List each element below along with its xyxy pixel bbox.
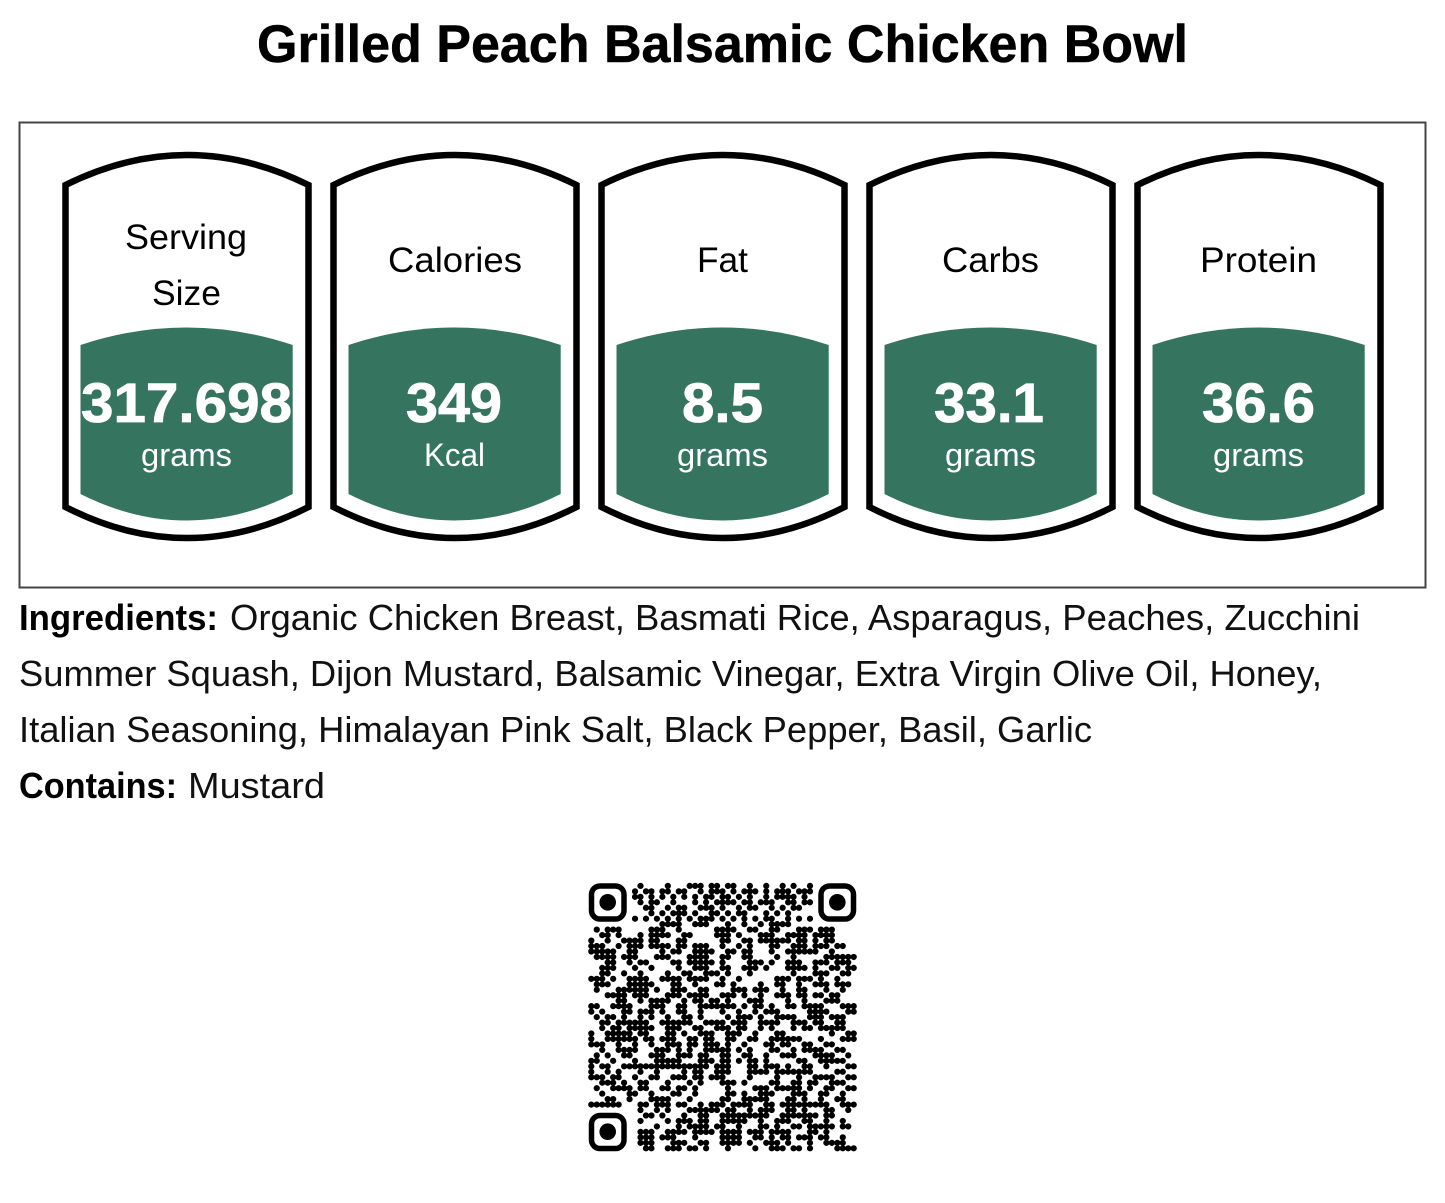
badge: calories: Calories xyxy=(388,241,522,280)
allergens text: Contains: xyxy=(19,765,177,806)
badge: serving size: Size xyxy=(152,274,221,313)
badge: calories xyxy=(334,155,576,538)
badge: carbs: grams xyxy=(945,437,1036,473)
ingredients text: Organic Chicken Breast, Basmati Rice, Asparagus, Peaches, Zucchini xyxy=(230,597,1360,638)
ingredients text: Ingredients: xyxy=(19,597,218,638)
badge: carbs: Carbs xyxy=(942,241,1039,280)
QR finder: bottom left xyxy=(592,1116,624,1148)
ingredients text xyxy=(19,597,1360,750)
badge: carbs xyxy=(870,155,1112,538)
badge: protein xyxy=(1138,155,1380,538)
allergens text xyxy=(19,765,325,806)
badge: calories: Kcal xyxy=(424,437,485,473)
QR code xyxy=(591,886,854,1148)
badge: fat xyxy=(602,155,844,538)
QR data modules xyxy=(591,886,854,1148)
ingredients text: Italian Seasoning, Himalayan Pink Salt, Black Pepper, Basil, Garlic xyxy=(19,709,1092,750)
badge: protein: grams xyxy=(1213,437,1304,473)
badge: carbs: 33.1 xyxy=(934,371,1044,434)
badge: serving size: grams xyxy=(141,437,232,473)
badge: protein: 36.6 xyxy=(1202,371,1315,434)
ingredients text: Summer Squash, Dijon Mustard, Balsamic Vinegar, Extra Virgin Olive Oil, Honey, xyxy=(19,653,1322,694)
badge: fat: grams xyxy=(677,437,768,473)
badge: serving size: 317.698 xyxy=(81,371,292,434)
badge: calories: 349 xyxy=(406,371,502,434)
QR finder: top right xyxy=(821,886,854,919)
allergens text: Mustard xyxy=(188,765,325,806)
title: Grilled Peach Balsamic Chicken Bowl xyxy=(257,15,1188,74)
badge: serving size: Serving xyxy=(125,218,247,257)
badge: fat: 8.5 xyxy=(682,371,763,434)
badge: protein: Protein xyxy=(1200,241,1317,280)
badge: fat: Fat xyxy=(697,241,748,280)
QR finder: top left xyxy=(592,886,624,919)
panel: nutrition facts xyxy=(20,122,1426,588)
badge: serving size xyxy=(66,155,308,538)
